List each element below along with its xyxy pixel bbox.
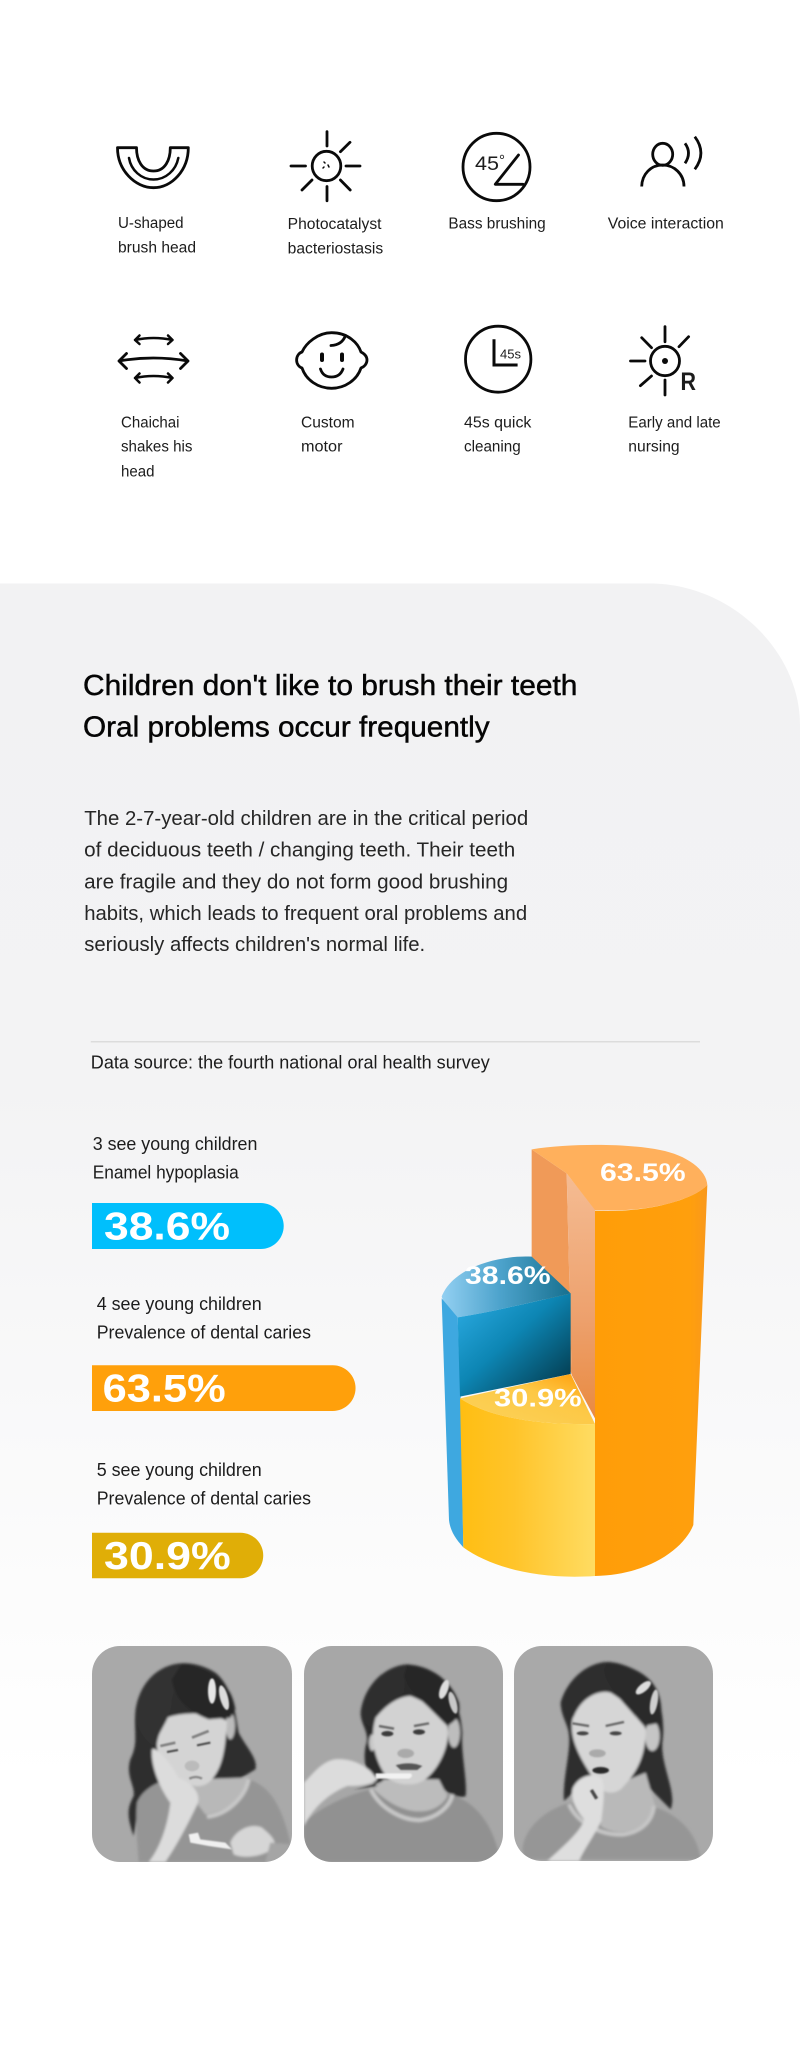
label: U-shaped brush head: U-shaped [118,215,184,232]
yellow slice [460,1374,595,1577]
photo: girl brushing with grimace [304,1646,503,1862]
stat: 4 year olds dental caries: 4 see young children [97,1294,262,1314]
heading: children don't like to brush: Oral problems occur frequently [83,712,490,744]
text block: intro paragraph: are fragile and they do not form good brushing [84,870,508,893]
text block: intro paragraph: habits, which leads to frequent oral problems and [84,902,527,925]
label: Chaichai shakes his head: Chaichai [121,415,180,432]
label: 45s quick cleaning: 45s quick [464,415,532,432]
stat: 4 year olds dental caries: Prevalence of dental caries [97,1322,311,1342]
heading: children don't like to brush [83,670,577,744]
panel: oral problems background [0,584,800,1780]
label: Chaichai shakes his head: head [121,464,154,481]
label: Custom motor [301,415,355,456]
text block: intro paragraph [84,807,528,956]
label: photocatalyst bacteriostasis: bacteriostasis [288,240,383,257]
label: Early and late nursing [628,415,721,456]
label: 45s quick cleaning: cleaning [464,439,521,456]
label: Custom motor: motor [301,439,342,456]
stat: 5 year olds dental caries: 30.9% [104,1535,231,1578]
label: photocatalyst bacteriostasis: Photocatalyst [288,216,382,233]
label: Custom motor: Custom [301,415,355,432]
label: Chaichai shakes his head: shakes his [121,439,193,456]
icon: early and late nursing sun: R [680,368,696,396]
stat: 5 year olds dental caries: 5 see young children [97,1460,262,1480]
icon: 45s clock: 45s [500,347,521,361]
label: photocatalyst bacteriostasis [288,216,383,257]
icon: baby face custom motor [297,333,367,388]
icon: U-shaped brush head [118,148,188,188]
stat: 4 year olds dental caries [92,1294,356,1411]
label: U-shaped brush head [118,215,196,257]
icon: 45 degree bass brushing: ° [499,152,505,169]
label: Chaichai shakes his head [121,415,193,481]
chart value labels: 30.9% [494,1386,582,1413]
chart value labels: 38.6% [465,1263,551,1290]
orange slice back wall [532,1149,595,1418]
photo: girl with toothache [92,1646,292,1862]
stat: 3 year olds enamel hypoplasia [92,1134,284,1249]
stat: 5 year olds dental caries: Prevalence of dental caries [97,1488,311,1508]
stat: 3 year olds enamel hypoplasia: Enamel hypoplasia [93,1162,240,1182]
label: U-shaped brush head: brush head [118,240,196,257]
label: Bass brushing: Bass brushing [448,215,546,232]
label: 45s quick cleaning [464,415,532,456]
stat: 3 year olds enamel hypoplasia: 3 see young children [93,1134,257,1154]
icon: shaking head arrows [119,336,188,382]
icon: 45 degree bass brushing: 45 [475,154,499,175]
stat: 5 year olds dental caries [92,1460,311,1578]
chart value labels [465,1160,686,1413]
stat: 4 year olds dental caries: 63.5% [103,1368,226,1411]
stat: 3 year olds enamel hypoplasia: 38.6% [104,1205,230,1248]
blue slice [442,1257,571,1547]
text block: intro paragraph: The 2-7-year-old children are in the critical period [84,807,528,830]
heading: children don't like to brush: Children don't like to brush their teeth [83,670,577,702]
label: Early and late nursing: nursing [628,439,680,456]
icon: photocatalyst sun [291,132,360,201]
text: data source: Data source: the fourth national oral health survey [91,1051,491,1072]
label: Early and late nursing: Early and late [628,415,721,432]
chart value labels: 63.5% [600,1160,686,1187]
icon: early and late nursing sun [630,327,696,396]
label: Voice interaction: Voice interaction [608,215,724,232]
orange slice [532,1145,707,1576]
icon: voice interaction [642,137,701,186]
photo: girl chewing toothbrush [514,1646,713,1861]
icon: 45s clock [466,326,531,392]
text block: intro paragraph: of deciduous teeth / changing teeth. Their teeth [84,839,515,862]
chart: 3D cylinder [442,1145,707,1577]
text block: intro paragraph: seriously affects children's normal life. [84,933,425,956]
icon: 45 degree bass brushing [463,133,530,201]
